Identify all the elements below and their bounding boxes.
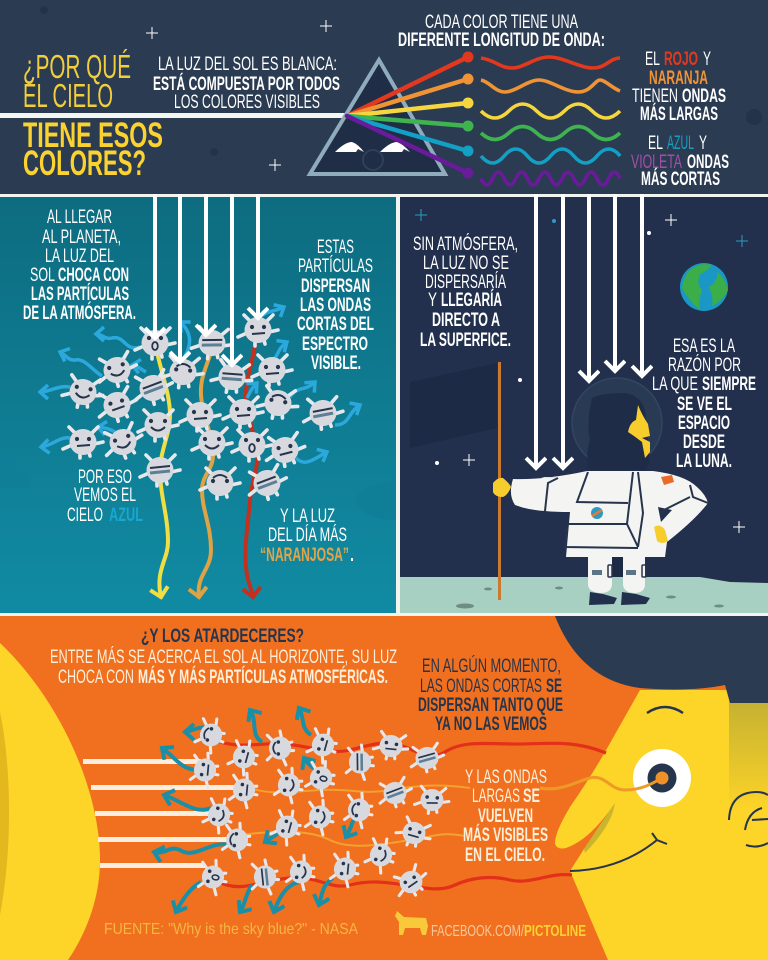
text: blue sky: AZUL	[109, 505, 143, 526]
text: blue and violet: Y	[699, 133, 707, 154]
text: orange daylight	[260, 506, 354, 566]
text: light hits particles: AL PLANETA,	[42, 227, 121, 248]
flag	[410, 363, 497, 448]
text: blue and violet: VIOLETA	[631, 152, 682, 173]
observer head	[555, 616, 768, 960]
text: particles scatter: DISPERSAN	[301, 276, 370, 297]
eyebrow	[647, 707, 683, 713]
scattered short-wave arrows	[154, 708, 355, 912]
prism eyes	[335, 142, 410, 152]
text: blue and violet: EL	[648, 133, 663, 154]
text: space from the moon: ESPACIO	[678, 413, 730, 434]
coloured wavy arrows	[157, 345, 257, 597]
text: sunlight is white: LA LUZ DEL SOL ES BLANCA:	[158, 54, 337, 75]
face glimpse	[628, 405, 650, 458]
text: particles scatter: LAS ONDAS	[300, 295, 371, 316]
source credit: FUENTE: "Why is the sky blue?" - NASA	[104, 921, 358, 938]
panel: atmosphere	[0, 194, 396, 613]
text: long waves visible: EN EL CIELO.	[465, 845, 545, 866]
main title: ¿POR QUÉ	[23, 48, 131, 85]
text: sunlight is white: LOS COLORES VISIBLES	[174, 92, 320, 113]
text: blue sky	[67, 467, 143, 526]
text: blue and violet	[631, 133, 729, 190]
text: no atmosphere: LA LUZ NO SE	[423, 253, 509, 274]
text: light hits particles: SOL	[30, 265, 55, 286]
text: particles scatter: PARTÍCULAS	[298, 256, 373, 277]
text: particles scatter: VISIBLE.	[311, 353, 361, 374]
colour waves	[481, 57, 620, 185]
smile	[570, 833, 667, 871]
head silhouette	[587, 393, 650, 470]
text: short waves scatter: SE	[546, 676, 562, 697]
long waves	[215, 740, 668, 889]
gloves	[493, 478, 511, 497]
text: no atmosphere: LA SUPERFICE.	[420, 330, 511, 351]
facebook credit: PICTOLINE	[524, 923, 586, 940]
text: closer to the horizon	[50, 647, 397, 688]
text: each colour wavelength: DIFERENTE LONGITUD DE ONDA:	[398, 30, 605, 51]
particles	[189, 715, 450, 902]
text: light hits particles: LA LUZ DEL	[45, 246, 114, 267]
text: red and orange: ROJO	[664, 49, 698, 70]
boots	[589, 592, 617, 605]
white light arrows	[155, 194, 258, 365]
text: space from the moon: LA LUNA.	[676, 451, 732, 472]
legs	[588, 557, 612, 593]
text: short waves scatter: YA NO LAS VEMOS	[435, 714, 547, 735]
text: light hits particles: AL LLEGAR	[47, 207, 112, 228]
particles	[61, 315, 344, 504]
coloured rays from prism	[347, 52, 474, 178]
text: long waves visible	[463, 767, 548, 866]
blue scattered arrows	[40, 307, 360, 462]
text: no atmosphere: SIN ATMÓSFERA,	[413, 233, 518, 255]
text: red and orange	[632, 49, 726, 125]
text: no atmosphere: Y	[428, 290, 437, 311]
text: space from the moon: ESA ES LA	[673, 336, 735, 357]
panel: prism header	[0, 0, 768, 194]
icon: pictoline mascot	[395, 911, 428, 935]
text: space from the moon	[652, 336, 756, 472]
text: sunlight is white: ESTÁ COMPUESTA POR TODOS	[153, 73, 340, 95]
text: closer to the horizon: CHOCA CON	[58, 667, 134, 688]
prism	[310, 60, 445, 174]
shaded side of head	[729, 700, 768, 810]
earth	[680, 263, 728, 311]
main title: EL CIELO	[23, 77, 113, 114]
text: long waves visible: MÁS VISIBLES	[463, 824, 548, 846]
main title	[23, 48, 163, 183]
text: no atmosphere	[413, 233, 518, 351]
text: short waves scatter	[418, 655, 563, 735]
text: light hits particles: DE LA ATMÓSFERA.	[23, 302, 136, 324]
ear	[729, 792, 768, 847]
sun beams	[83, 759, 241, 868]
panel: sunsets	[0, 616, 768, 960]
text: particles scatter: CORTAS DEL	[297, 314, 374, 335]
text: red and orange: ONDAS	[682, 86, 726, 107]
divider band	[0, 194, 768, 616]
text: long waves visible: SE	[523, 786, 540, 807]
text: short waves scatter: LAS ONDAS CORTAS	[420, 676, 542, 697]
helmet	[572, 378, 662, 468]
text: light hits particles: CHOCA CON	[58, 265, 129, 286]
text: long waves visible: VUELVEN	[478, 806, 533, 827]
text: blue sky: CIELO	[67, 505, 103, 526]
text: orange daylight: “NARANJOSA”	[260, 545, 349, 566]
text: each colour wavelength	[398, 12, 605, 51]
text: blue and violet: ONDAS	[687, 152, 729, 173]
text: orange daylight: .	[350, 545, 354, 566]
text: blue and violet: MÁS CORTAS	[641, 168, 720, 190]
text: blue sky: POR ESO	[78, 467, 132, 488]
astronaut	[493, 378, 708, 605]
text: orange daylight: Y LA LUZ	[280, 506, 335, 527]
suit	[511, 471, 708, 557]
text: particles scatter: ESTAS	[317, 237, 354, 258]
text: each colour wavelength: CADA COLOR TIENE UNA	[425, 12, 578, 33]
text: red and orange: NARANJA	[649, 68, 708, 89]
text: space from the moon: SE VE EL	[677, 394, 732, 415]
text: long waves visible: Y LAS ONDAS	[465, 767, 547, 788]
eye	[633, 749, 691, 807]
text: red and orange: TIENEN	[632, 86, 678, 107]
text: short waves scatter: DISPERSAN TANTO QUE	[418, 695, 563, 716]
main title: TIENE ESOS	[23, 116, 163, 155]
text: no atmosphere: DISPERSARÍA	[425, 272, 506, 293]
text: orange daylight: DEL DÍA MÁS	[268, 525, 347, 546]
text: closer to the horizon: ENTRE MÁS SE ACERCA EL SOL AL HORIZONTE, SU LUZ	[50, 647, 397, 668]
text: sunlight is white	[153, 54, 340, 113]
flag pole	[498, 362, 501, 600]
text: no atmosphere: DIRECTO A	[432, 310, 500, 331]
heading: and the sunsets: ¿Y LOS ATARDECERES?	[141, 626, 304, 647]
panel: moon	[400, 194, 768, 613]
text: short waves scatter: EN ALGÚN MOMENTO,	[422, 655, 561, 677]
text: red and orange: EL	[645, 49, 660, 70]
facebook credit: FACEBOOK.COM/	[431, 923, 524, 940]
hair	[555, 616, 768, 703]
text: space from the moon: LA QUE	[652, 374, 698, 395]
text: long waves visible: LARGAS	[472, 786, 520, 807]
text: particles scatter: ESPECTRO	[302, 334, 368, 355]
moon ground	[400, 577, 768, 613]
text: red and orange: MÁS LARGAS	[640, 103, 718, 125]
text: blue and violet: AZUL	[667, 133, 694, 154]
text: light hits particles: LAS PARTÍCULAS	[31, 283, 129, 305]
text: red and orange: Y	[703, 49, 711, 70]
text: no atmosphere: LLEGARÍA	[441, 289, 502, 311]
sun	[0, 643, 100, 960]
text: blue sky: VEMOS EL	[74, 485, 136, 506]
main title: COLORES?	[23, 144, 146, 183]
text: light hits particles	[23, 207, 136, 324]
white light beam	[0, 113, 348, 118]
text: particles scatter	[297, 237, 374, 374]
text: closer to the horizon: MÁS Y MÁS PARTÍCULAS ATMOSFÉRICAS.	[138, 666, 388, 688]
white light arrows	[536, 194, 642, 468]
text: space from the moon: DESDE	[683, 432, 725, 453]
